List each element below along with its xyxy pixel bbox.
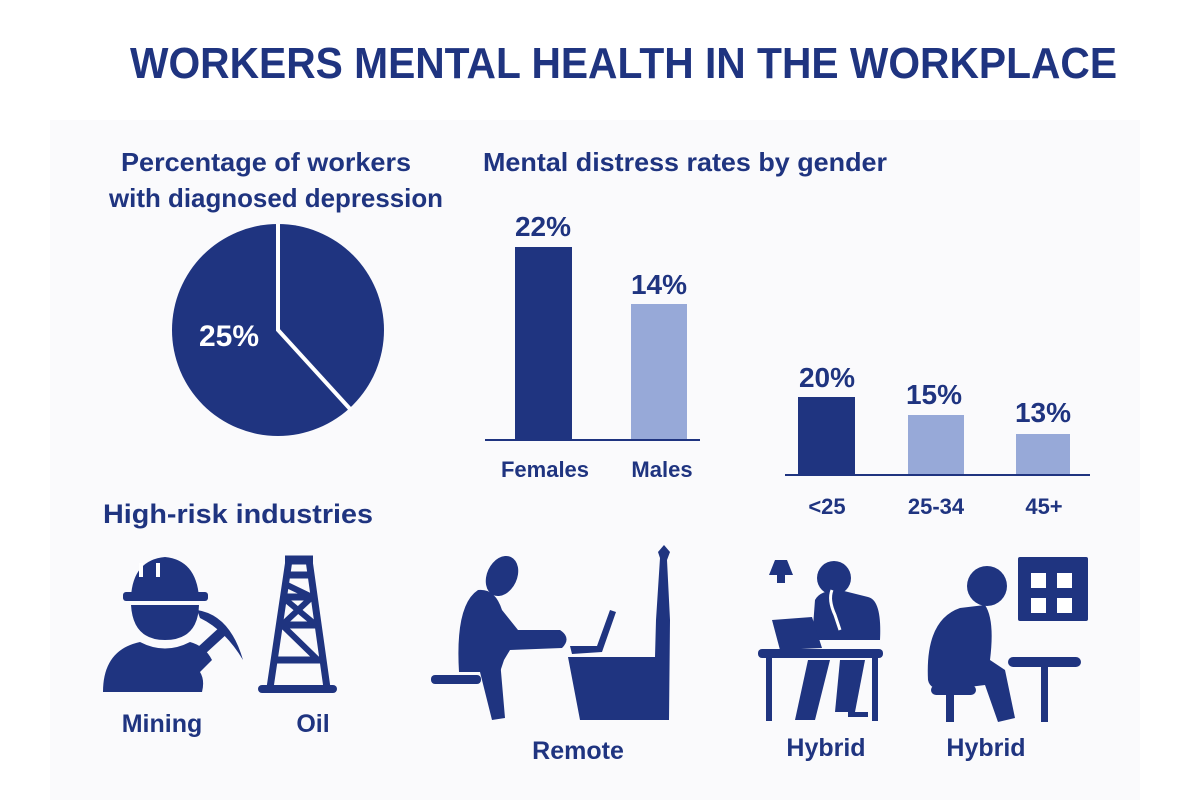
bar: males — [631, 269, 693, 482]
panel: depression pie — [108, 147, 443, 436]
label: oil: Oil — [296, 710, 330, 738]
label: remote: Remote — [532, 737, 624, 765]
heading: gender: Mental distress rates by gender — [483, 147, 887, 177]
panel: age bar chart — [785, 362, 1090, 519]
bar: females: Females — [501, 457, 589, 482]
bar: 45+: 45+ — [1025, 494, 1063, 519]
heading: pie: with diagnosed depression — [108, 183, 443, 213]
title: WORKERS MENTAL HEALTH IN THE WORKPLACE — [130, 39, 1117, 88]
icon: miner — [103, 557, 243, 692]
heading: high-risk industries: High-risk industries — [103, 499, 373, 529]
bar: females — [501, 211, 589, 482]
icon: hybrid worker at laptop — [758, 560, 883, 721]
panel: gender bar chart — [483, 147, 887, 482]
pie chart: 25% — [199, 320, 259, 353]
icon: remote worker — [431, 545, 670, 720]
bar: males: Males — [631, 457, 693, 482]
bar: under 25: 20% — [799, 362, 855, 393]
bar: females: 22% — [515, 211, 571, 242]
bar: 25-34: 15% — [906, 379, 962, 410]
icon: hybrid worker distressed — [928, 557, 1088, 722]
pie chart — [172, 224, 384, 436]
icon: oil derrick — [262, 560, 333, 689]
label: hybrid 2: Hybrid — [946, 734, 1026, 762]
heading: pie — [108, 147, 443, 213]
heading: pie: Percentage of workers — [121, 147, 411, 177]
bar: 45+: 13% — [1015, 397, 1071, 428]
bar: under 25: <25 — [808, 494, 846, 519]
bar: 45+ — [1015, 397, 1071, 519]
bar: 25-34: 25-34 — [908, 494, 965, 519]
bar: under 25 — [798, 362, 855, 519]
label: hybrid 1: Hybrid — [786, 734, 866, 762]
bar: males: 14% — [631, 269, 687, 300]
label: mining: Mining — [122, 710, 202, 738]
bar: 25-34 — [906, 379, 965, 519]
